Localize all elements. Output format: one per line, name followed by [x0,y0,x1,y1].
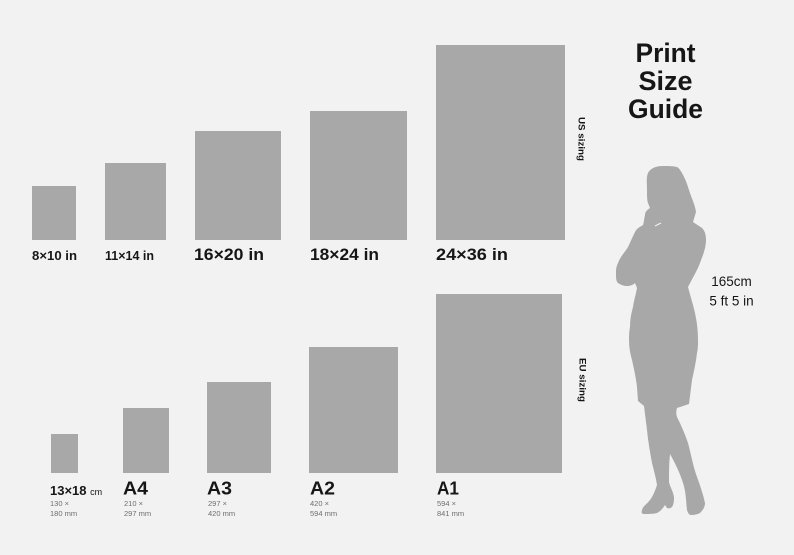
A2 poster [309,347,398,518]
13x18 cm poster: 130 × [50,499,69,508]
A4 poster [123,408,169,518]
16x20 in poster [194,131,281,264]
A3 poster: A3 [207,478,232,498]
8x10 in poster [32,186,77,263]
A2 poster: 594 mm [310,509,337,518]
EU sizing label: EU sizing [576,358,588,402]
24x36 in poster [436,45,565,264]
A1 poster: 594 × [437,499,456,508]
A4 poster: 297 mm [124,509,151,518]
A4 poster: 210 × [124,499,143,508]
13x18 cm poster: 13×18 cm [50,483,102,498]
16x20 in poster: 16×20 in [194,246,264,264]
title: Guide [628,94,703,124]
hand highlight [655,223,661,226]
A1 poster: A1 [437,478,459,498]
A3 poster: 420 mm [208,509,235,518]
woman silhouette [616,166,706,515]
11x14 in poster: 11×14 in [105,249,154,263]
A3 poster [207,382,271,518]
A2 poster: A2 [310,478,335,498]
18x24 in poster [310,111,407,264]
title [628,38,703,124]
title: Print [636,38,696,68]
11x14 in poster [105,163,166,263]
US sizing row [32,45,586,264]
A4 poster: A4 [123,478,149,498]
8x10 in poster: 8×10 in [32,249,77,263]
A2 poster: 420 × [310,499,329,508]
24x36 in poster: 24×36 in [436,246,508,264]
US sizing label: US sizing [576,117,586,161]
EU sizing row [50,294,588,518]
A1 poster [436,294,562,518]
13x18 cm poster: 180 mm [50,509,77,518]
height label [709,274,754,308]
A3 poster: 297 × [208,499,227,508]
A1 poster: 841 mm [437,509,464,518]
18x24 in poster: 18×24 in [310,246,379,264]
13x18 cm poster [50,434,102,518]
height label: 5 ft 5 in [709,294,754,308]
height label: 165cm [711,274,752,289]
title: Size [638,66,692,96]
